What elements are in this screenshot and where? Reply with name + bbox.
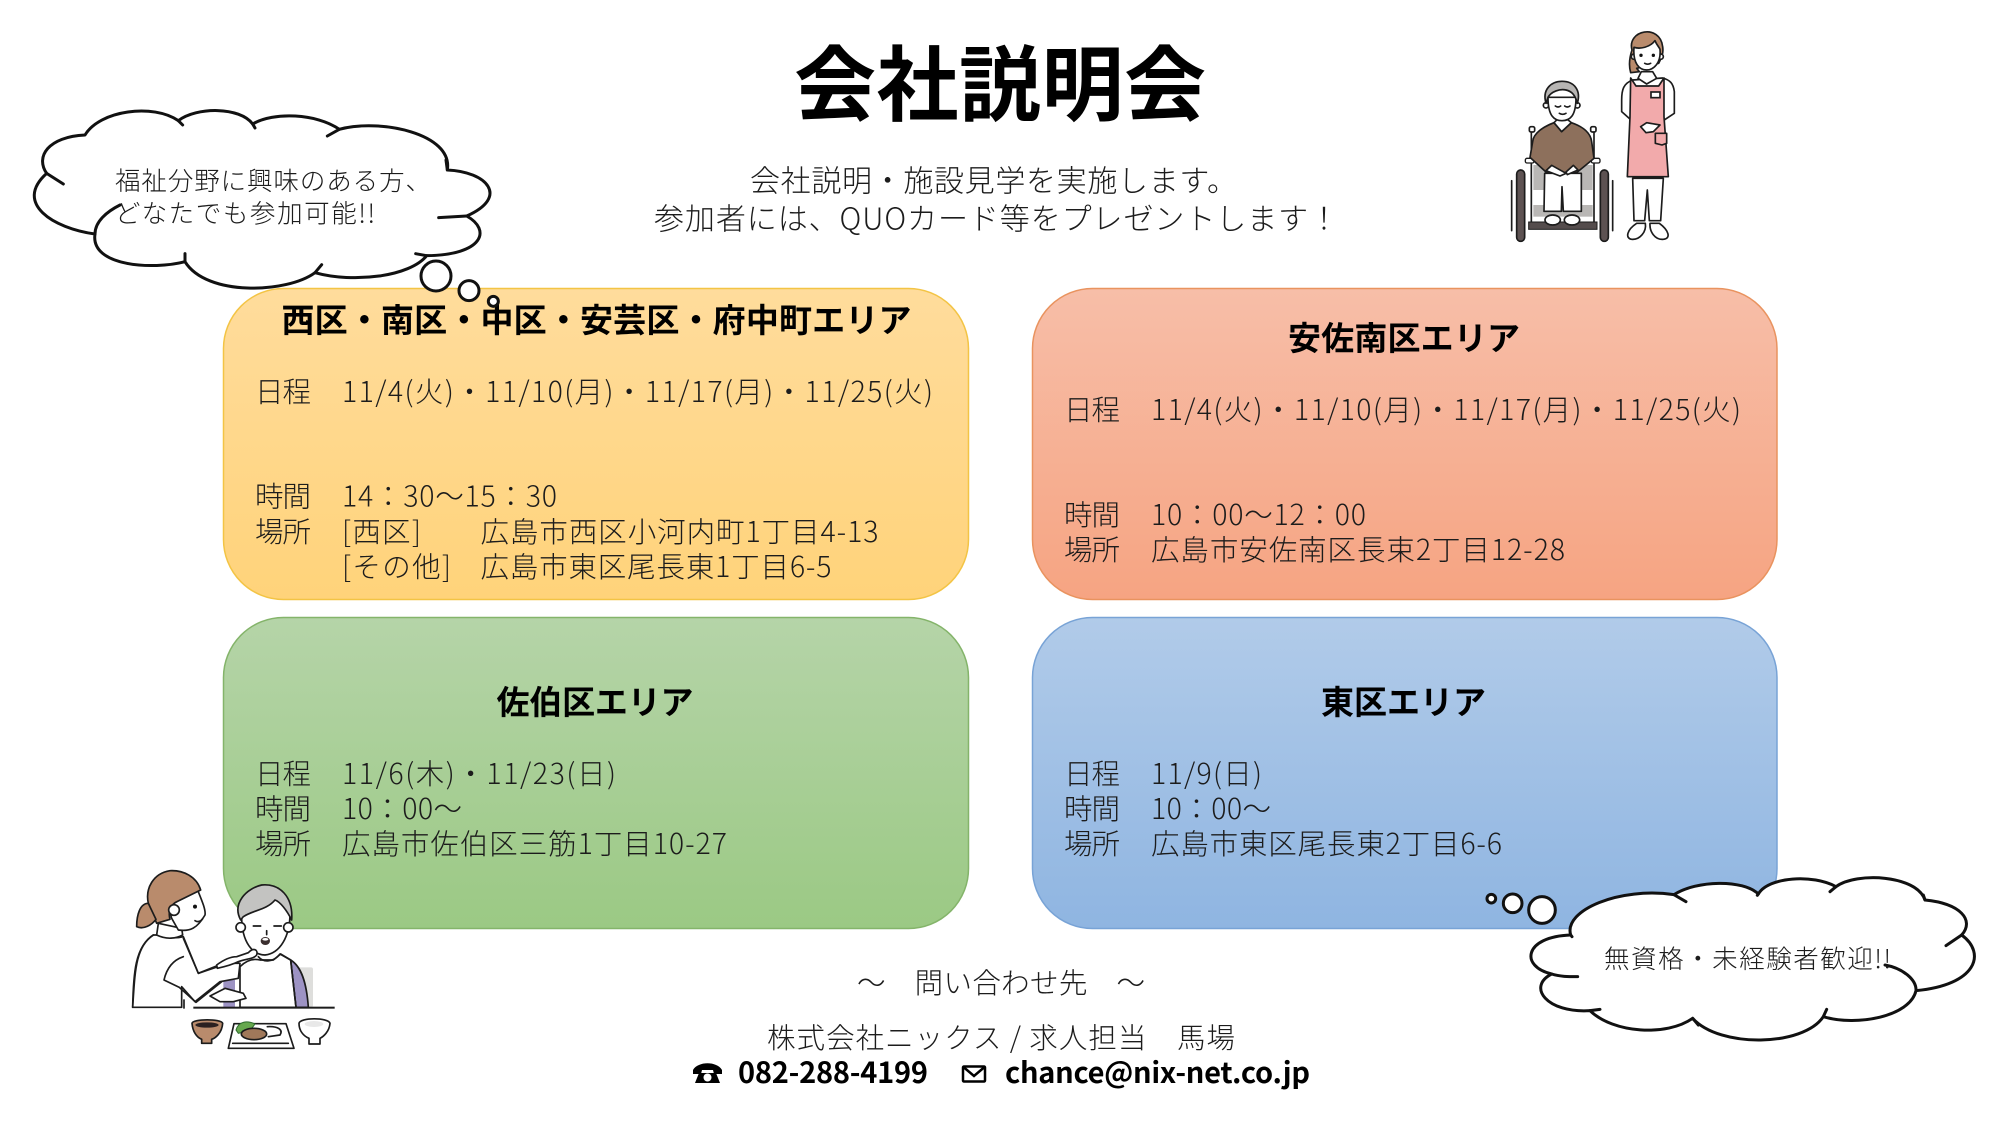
contact block bbox=[693, 961, 1310, 1092]
intro text: 参加者には、QUOカード等をプレゼントします！ bbox=[654, 194, 1339, 238]
place row: 場所 bbox=[1064, 822, 1120, 863]
callout: thought bubble bottom right bbox=[1487, 878, 1974, 1040]
time row: 時間 bbox=[1064, 493, 1120, 534]
schedule row: 11/4(火)・11/10(月)・11/17(月)・11/25(火) bbox=[342, 370, 933, 411]
intro text bbox=[654, 156, 1339, 238]
place row: 広島市東区尾長東2丁目6-6 bbox=[1151, 822, 1502, 863]
contact heading: 〜 問い合わせ先 〜 bbox=[857, 961, 1145, 1002]
place row: 広島市安佐南区長束2丁目12-28 bbox=[1151, 528, 1565, 569]
icon: telephone bbox=[693, 1063, 722, 1083]
time row: 時間 bbox=[255, 787, 311, 828]
time row: 時間 bbox=[1064, 787, 1120, 828]
title: 会社説明会 bbox=[794, 19, 1206, 138]
panel: west / south / central area bbox=[224, 288, 968, 600]
phone number: 082-288-4199 bbox=[738, 1050, 928, 1092]
place row: 場所 bbox=[255, 822, 311, 863]
time row: 10：00〜 bbox=[1151, 787, 1271, 828]
food tray bbox=[228, 1022, 294, 1048]
schedule row: 日程 bbox=[1064, 752, 1120, 793]
heading: Higashi area: 東区エリア bbox=[1321, 676, 1486, 724]
panel: Saeki area bbox=[224, 618, 968, 928]
heading: Saeki area: 佐伯区エリア bbox=[496, 676, 694, 724]
time row bbox=[1064, 787, 1271, 828]
schedule row: 日程 bbox=[255, 370, 311, 411]
callout text: 無資格・未経験者歓迎!! bbox=[1604, 939, 1891, 976]
place row: [その他] bbox=[342, 545, 451, 586]
seated man bbox=[1530, 81, 1594, 225]
resident bbox=[223, 885, 313, 1007]
soup bowl bbox=[192, 1020, 223, 1043]
place row: [西区] bbox=[342, 510, 421, 551]
schedule row: 11/9(日) bbox=[1151, 752, 1262, 793]
icon: mail bbox=[963, 1066, 985, 1082]
panel: Higashi area bbox=[1032, 618, 1777, 928]
time row: 時間 bbox=[255, 474, 311, 516]
icon: caregiver and wheelchair user bbox=[1512, 32, 1674, 241]
panel: Asaminami area bbox=[1032, 288, 1777, 600]
time row: 10：00〜 bbox=[342, 787, 462, 828]
intro text: 会社説明・施設見学を実施します。 bbox=[750, 156, 1237, 200]
wheelchair bbox=[1512, 127, 1613, 241]
place row: 場所 bbox=[1064, 528, 1120, 569]
place row: 広島市佐伯区三筋1丁目10-27 bbox=[342, 822, 727, 863]
table edge bbox=[193, 1007, 335, 1009]
icon: caregiver feeding resident bbox=[133, 871, 335, 1048]
callout text: 福祉分野に興味のある方、 bbox=[115, 161, 431, 198]
place row: 広島市西区小河内町1丁目4-13 bbox=[480, 510, 878, 551]
caregiver bbox=[133, 871, 257, 1008]
place row: 広島市東区尾長東1丁目6-5 bbox=[480, 545, 832, 586]
standing caregiver bbox=[1622, 32, 1674, 239]
schedule row: 日程 bbox=[255, 752, 311, 793]
schedule row: 11/6(木)・11/23(日) bbox=[342, 752, 616, 793]
schedule row bbox=[1064, 752, 1262, 793]
time row: 14：30〜15：30 bbox=[342, 474, 557, 516]
time row bbox=[255, 787, 462, 828]
heading: west area: 西区・南区・中区・安芸区・府中町エリア bbox=[282, 294, 912, 342]
rice bowl bbox=[299, 1019, 330, 1044]
schedule row: 11/4(火)・11/10(月)・11/17(月)・11/25(火) bbox=[1151, 388, 1741, 429]
time row: 10：00〜12：00 bbox=[1151, 493, 1366, 534]
company line: 株式会社ニックス / 求人担当 馬場 bbox=[767, 1016, 1235, 1057]
heading: Asaminami area: 安佐南区エリア bbox=[1288, 312, 1520, 360]
schedule row: 日程 bbox=[1064, 388, 1120, 429]
callout: thought bubble top left: どなたでも参加可能!! bbox=[115, 194, 375, 230]
place row: 場所 bbox=[255, 510, 311, 551]
callout: thought bubble top left bbox=[34, 111, 498, 306]
email address: chance@nix-net.co.jp bbox=[1005, 1050, 1310, 1092]
place row bbox=[255, 510, 878, 586]
